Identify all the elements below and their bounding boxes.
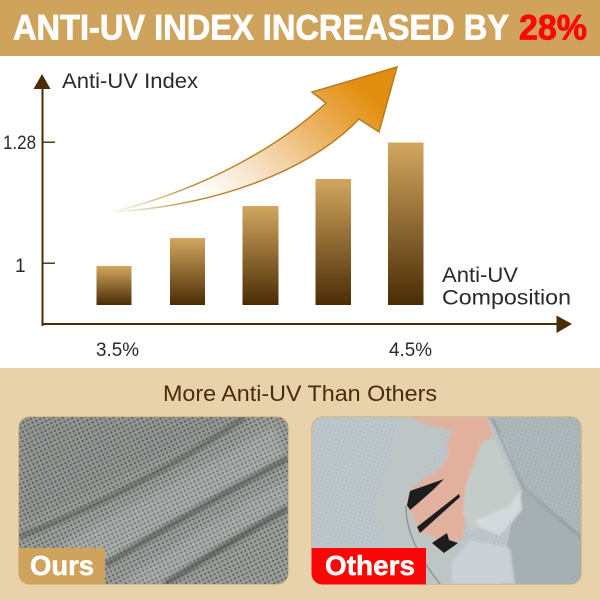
x axis title: Composition xyxy=(442,286,571,310)
title banner: ANTI-UV INDEX INCREASED BY xyxy=(13,8,509,48)
photo: ours fabric xyxy=(18,416,288,584)
label: Others: Others xyxy=(325,550,415,581)
x axis title: Anti-UV xyxy=(442,264,518,287)
bars xyxy=(96,142,424,305)
x axis title xyxy=(442,264,571,310)
y axis title: Anti-UV Index xyxy=(62,70,199,93)
x axis with arrowhead xyxy=(42,316,572,333)
label: Others xyxy=(312,548,426,584)
photo: others torn fabric with hand xyxy=(312,416,582,584)
comparison heading: More Anti-UV Than Others xyxy=(163,381,437,406)
panel: comparison xyxy=(0,368,600,600)
x label 4.5%: 4.5% xyxy=(389,339,432,361)
icon: rising arrow xyxy=(113,67,397,212)
y tick label 1: 1 xyxy=(15,256,26,277)
y tick label 1.28: 1.28 xyxy=(3,133,36,154)
title banner xyxy=(0,0,600,56)
y axis ticks xyxy=(43,142,55,264)
x label 3.5%: 3.5% xyxy=(96,339,139,361)
y axis with arrowhead xyxy=(34,74,50,326)
label: Ours: Ours xyxy=(30,550,94,581)
title banner: 28% xyxy=(519,8,587,48)
label: Ours xyxy=(19,548,105,584)
chart: anti-UV index bars xyxy=(3,70,572,361)
